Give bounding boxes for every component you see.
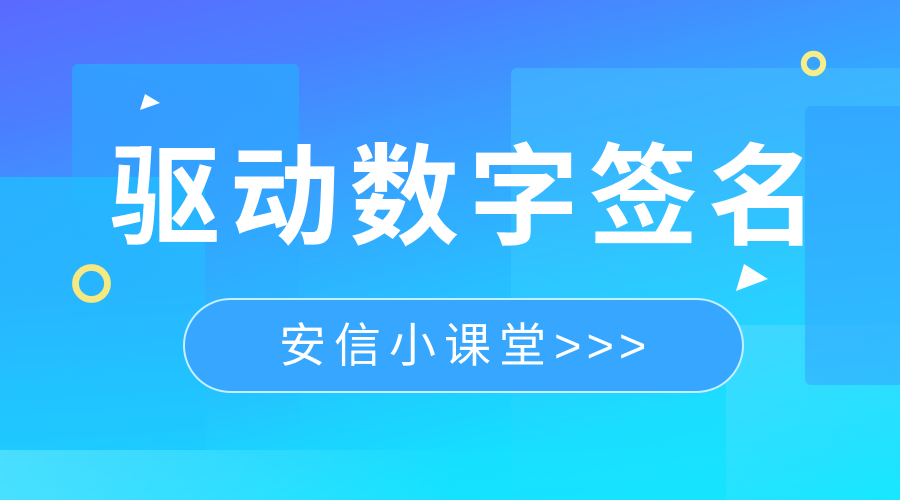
pill button: [183, 298, 744, 393]
title: 驱动数字签名: [110, 137, 828, 260]
icon: large white triangle: [736, 264, 768, 291]
panel: right large block: [511, 68, 900, 500]
panel: left rounded rectangle: [72, 64, 299, 450]
icon: small white triangle: [140, 94, 160, 110]
button label: 安信小课堂>>>: [279, 319, 651, 372]
panel: left light block: [0, 177, 205, 450]
panel: lower right light block: [726, 325, 900, 500]
panel: bottom band: [0, 450, 900, 500]
icon: top right yellow ring: [800, 50, 826, 76]
panel: right blue block: [805, 106, 900, 385]
icon: left yellow ring: [72, 264, 111, 303]
